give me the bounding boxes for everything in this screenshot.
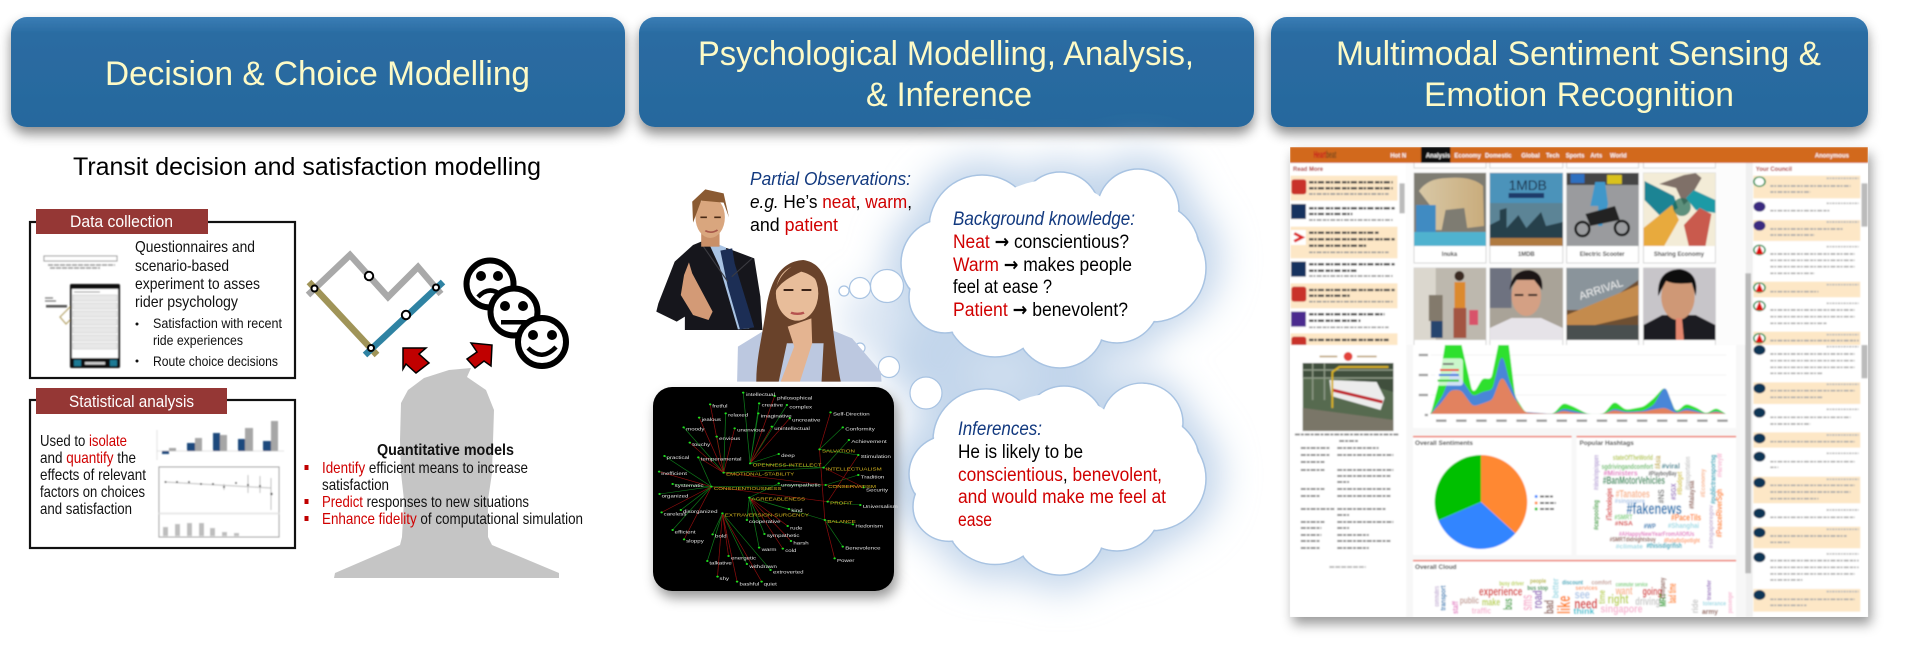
background knowledge text <box>953 209 1135 321</box>
overall sentiment pie chart <box>1413 436 1572 555</box>
network graph: extroverted <box>773 570 804 575</box>
right comment feed <box>1745 163 1868 617</box>
background knowledge text: Neat → conscientious? <box>953 231 1129 253</box>
data collection text: Route choice decisions <box>153 353 278 369</box>
network graph: rude <box>790 526 802 531</box>
photo: interview portrait <box>1490 268 1563 340</box>
network graph: temperamental <box>701 457 742 462</box>
dashboard top bar: Arts <box>1590 153 1603 160</box>
silhouette head <box>334 368 559 578</box>
data collection text: Questionnaires and <box>135 239 255 256</box>
overall word cloud: people <box>1530 578 1546 585</box>
popular hashtags word cloud: #climate <box>1616 542 1643 550</box>
overall word cloud: need <box>1574 597 1598 612</box>
overall word cloud: make <box>1482 598 1500 608</box>
popular hashtags word cloud: #Economy <box>1700 469 1707 497</box>
overall word cloud: see <box>1575 587 1590 601</box>
network graph: unenvious <box>737 428 765 433</box>
partial observations text <box>750 169 912 235</box>
panel: semantic network <box>653 387 898 591</box>
photo: 1MDB skyline: 1MDB <box>1509 177 1547 193</box>
network graph: SALVATION <box>822 449 855 454</box>
dashboard top bar: Global <box>1521 153 1540 160</box>
network graph: sympathetic <box>767 533 800 539</box>
popular hashtags word cloud: #SMRT <box>1614 512 1633 521</box>
quantitative models text <box>304 442 583 528</box>
overall word cloud: transport <box>1440 585 1448 611</box>
news image cards: Economy <box>1454 153 1482 160</box>
overall word cloud: commuter service <box>1616 582 1648 588</box>
network graph: Conformity <box>845 427 875 432</box>
inferences text: conscientious, benevolent, <box>958 465 1162 486</box>
popular hashtags word cloud: #Tanatoes <box>1616 487 1650 500</box>
overall word cloud: time <box>1596 590 1607 604</box>
arrow: right red arrow <box>467 343 492 368</box>
popular hashtags word cloud: #BanMotorVehicles <box>1603 474 1665 487</box>
dashboard top bar: Heartbeat <box>1314 150 1337 161</box>
network graph: relaxed <box>728 413 748 418</box>
popular hashtags word cloud: #Malaysia <box>1689 480 1696 509</box>
bar chart <box>157 421 284 460</box>
left news feed <box>1290 163 1406 347</box>
overall word cloud: transfer <box>1705 580 1713 600</box>
overall word cloud: going <box>1643 585 1662 598</box>
photo: minister portrait <box>1644 268 1715 340</box>
popular hashtags word cloud: #SMRTdidnightsbuy <box>1610 535 1656 543</box>
network graph: inefficient <box>661 471 687 477</box>
inferences text: He is likely to be <box>958 442 1083 463</box>
overall sentiment pie chart: Overall Sentiments <box>1415 440 1473 447</box>
popular hashtags word cloud: #Asia <box>1653 455 1663 469</box>
popular hashtags word cloud: sgdrivingandcomfort <box>1602 463 1653 471</box>
network graph: warm <box>760 547 777 553</box>
background knowledge text: Patient → benevolent? <box>953 299 1128 321</box>
tab: statistical analysis: Statistical analysis <box>69 392 194 411</box>
data collection text: experiment to asses <box>135 276 260 293</box>
photo: arrival hall: ARRIVAL <box>1578 277 1625 303</box>
statistical analysis text: Used to isolate <box>40 433 127 450</box>
overall word cloud: experience <box>1479 585 1522 598</box>
popular hashtags word cloud: #WP <box>1644 522 1656 530</box>
network graph: harsh <box>793 541 809 546</box>
overall word cloud: tolerance <box>1703 601 1726 607</box>
network graph: cooperative <box>749 519 781 525</box>
network graph: creative <box>762 403 783 408</box>
news image cards: Analysis <box>1426 153 1451 160</box>
network graph: unsympathetic <box>781 483 821 488</box>
network graph: Security <box>866 488 888 493</box>
quantitative models text: Quantitative models <box>377 442 514 459</box>
statistical analysis text: and quantify the <box>40 450 136 467</box>
network graph: disorganized <box>683 509 717 515</box>
overall word cloud: want <box>1615 584 1633 597</box>
arrow: left red arrow <box>403 348 429 373</box>
network graph: PROFIT <box>830 501 853 506</box>
network graph: intellectual <box>746 392 775 398</box>
network graph: careless <box>664 512 687 517</box>
overall word cloud: comfort <box>1592 580 1612 586</box>
panel: heartbeat dashboard <box>1290 147 1868 620</box>
popular hashtags word cloud: #singaporegov <box>1708 504 1715 548</box>
overall word cloud: Overall Cloud <box>1415 564 1457 571</box>
icon: happy face <box>518 318 566 366</box>
inferences text: and would make me feel at <box>958 487 1167 508</box>
inferences text: ease <box>958 510 992 531</box>
network graph: envious <box>719 436 740 442</box>
panel: data collection <box>30 209 295 378</box>
dashboard top bar: Analysis <box>1426 153 1451 160</box>
network graph: unintellectual <box>774 426 810 432</box>
overall word cloud: traffic <box>1472 606 1491 615</box>
dashboard top bar: Hot News <box>1390 153 1418 160</box>
transit map icon <box>308 255 443 355</box>
network graph: complex <box>789 405 812 410</box>
statistical analysis text: effects of relevant <box>40 467 146 484</box>
icon: sad face <box>466 260 514 308</box>
image captions: Electric Scooter <box>1580 252 1625 258</box>
popular hashtags word cloud: #ReliefInSpotlight <box>1664 536 1700 544</box>
quantitative models text: satisfaction <box>322 477 389 494</box>
header: multimodal sentiment sensing <box>1271 17 1868 127</box>
network graph: organized <box>662 494 688 499</box>
partial observations text: Partial Observations: <box>750 169 911 189</box>
overall word cloud: MRT <box>1657 593 1668 607</box>
overall word cloud: better <box>1550 578 1561 598</box>
icon: neutral face <box>490 288 538 336</box>
overall word cloud: ride <box>1689 599 1700 613</box>
network graph: BALANCE <box>827 519 856 525</box>
photo: MRT train <box>1303 363 1393 431</box>
tab: statistical analysis <box>36 388 227 414</box>
overall word cloud <box>1413 560 1736 620</box>
network graph: EXTRAVERSION-SURGENCY <box>725 513 809 518</box>
overall word cloud: army <box>1702 608 1718 616</box>
popular hashtags word cloud: #singapore <box>1615 497 1645 505</box>
dashboard top bar: Anonymous <box>1815 153 1850 160</box>
photo: polar bear <box>1414 173 1486 246</box>
dashboard top bar: Domestic <box>1485 153 1512 160</box>
header: psychological modelling: & Inference <box>866 76 1032 114</box>
popular hashtags word cloud: #SGX <box>1670 483 1678 500</box>
quantitative models text: Predict responses to new situations <box>322 494 529 511</box>
cloud: background knowledge <box>901 169 1206 368</box>
panel: statistical analysis <box>30 388 295 548</box>
network graph: imaginative <box>761 414 792 419</box>
network graph: uncreative <box>792 418 820 423</box>
popular hashtags word cloud: #fakenews <box>1626 500 1682 518</box>
photo: thinking woman <box>737 260 882 382</box>
header: decision and choice modelling: Decision & Choice Modelling <box>105 55 530 93</box>
survey phone screenshot <box>44 256 120 368</box>
popular hashtags word cloud: #Ministers <box>1604 469 1638 477</box>
network graph: philosophical <box>777 396 812 401</box>
dashboard top bar: Tech <box>1546 153 1560 160</box>
popular hashtags word cloud: stateOfTheWorld <box>1613 454 1653 462</box>
news image cards: Tech <box>1546 153 1560 160</box>
network graph: Achievement <box>851 439 887 445</box>
popular hashtags word cloud: #transportation <box>1684 457 1692 490</box>
network graph: systematic <box>675 483 704 489</box>
photo: hands illustration <box>1644 173 1715 246</box>
data collection text: ride experiences <box>153 332 243 348</box>
network graph: bashful <box>740 582 759 587</box>
thought bubble dots <box>839 270 942 409</box>
photo: elderly walker <box>1414 268 1486 340</box>
overall word cloud: public <box>1460 596 1479 606</box>
data collection text: Satisfaction with recent <box>153 315 282 331</box>
network graph: deep <box>781 453 795 459</box>
right comment feed: Your Council <box>1756 167 1792 173</box>
network graph: fretful <box>712 404 727 409</box>
network graph: INTELLECTUALISM <box>826 467 882 472</box>
inferences text: Inferences: <box>958 419 1042 440</box>
news image cards: Sports <box>1566 153 1585 160</box>
background knowledge text: Background knowledge: <box>953 209 1135 230</box>
network graph: Stimulation <box>861 454 891 460</box>
overall word cloud: driving <box>1635 595 1660 608</box>
network graph: efficient <box>675 530 696 535</box>
overall word cloud: bad time <box>1667 583 1679 603</box>
popular hashtags word cloud: #NS <box>1657 489 1666 503</box>
overall word cloud: company <box>1660 577 1667 598</box>
overall word cloud: sms <box>1519 595 1536 611</box>
center background <box>1406 163 1746 345</box>
line and bar plot <box>159 467 279 537</box>
overall word cloud: right <box>1608 592 1629 607</box>
network graph: energetic <box>731 556 756 561</box>
background knowledge text: feel at ease ? <box>953 277 1052 298</box>
network graph: Universalism <box>863 504 898 510</box>
popular hashtags word cloud: #PaceTils <box>1671 513 1701 523</box>
network graph: Tradition <box>861 475 884 480</box>
network graph: shy <box>720 576 729 582</box>
photo: 1MDB skyline <box>1490 173 1563 246</box>
cloud glow background <box>856 169 1206 575</box>
popular hashtags word cloud: #AHappyNewYearFromAllOfUs <box>1619 530 1694 538</box>
news image cards: Domestic <box>1485 153 1512 160</box>
tab: data collection <box>36 209 208 234</box>
network graph: OPENNESS-INTELLECT <box>753 463 822 468</box>
partial observations text: and patient <box>750 215 838 235</box>
network graph: EMOTIONAL-STABILITY <box>726 472 795 477</box>
company profile card <box>1290 344 1399 568</box>
overall word cloud: bad <box>1541 600 1557 614</box>
photo: arrival hall <box>1567 268 1639 340</box>
network graph: practical <box>667 455 689 461</box>
quantitative models text: Identify efficient means to increase <box>322 460 528 477</box>
statistical analysis text: factors on choices <box>40 484 145 501</box>
popular hashtags word cloud: #ridesharingsingapore <box>1593 455 1601 490</box>
overall word cloud: services <box>1575 585 1598 592</box>
popular hashtags word cloud: #HarveyW <box>1717 453 1724 477</box>
area chart <box>1413 344 1728 422</box>
overall word cloud: commuters <box>1433 586 1441 607</box>
header: psychological modelling <box>639 17 1254 127</box>
cloud: inferences <box>909 383 1206 575</box>
popular hashtags word cloud: #carpooling <box>1593 500 1601 530</box>
data collection text: scenario-based <box>135 258 229 275</box>
statistical analysis text <box>40 433 146 518</box>
network graph: CONSERVATISM <box>828 484 876 490</box>
header: multimodal sentiment sensing: Multimodal Sentiment Sensing & <box>1336 35 1821 73</box>
network graph: cold <box>785 548 796 554</box>
photo: motorbike rider <box>1567 173 1639 246</box>
quantitative models text: Enhance fidelity of computational simulation <box>322 511 583 528</box>
subtitle: transit modelling: Transit decision and satisfaction modelling <box>73 153 541 181</box>
overall word cloud: busy driver <box>1499 581 1524 587</box>
network graph: talkative <box>709 561 732 566</box>
popular hashtags word cloud: #Budget <box>1676 471 1684 495</box>
overall word cloud: bus stop <box>1527 585 1548 592</box>
network graph <box>658 392 898 587</box>
data collection text <box>135 239 282 369</box>
network graph: AGREEABLENESS <box>751 497 805 502</box>
dashboard top bar: Economy <box>1454 153 1482 160</box>
image captions <box>1442 252 1705 258</box>
left news feed: Read More <box>1293 167 1324 173</box>
overall word cloud: passenger <box>1727 591 1734 613</box>
network graph: jealous <box>701 417 721 423</box>
popular hashtags word cloud: #Technologies <box>1604 488 1614 521</box>
header: decision and choice modelling <box>11 17 625 127</box>
network graph: Benevolence <box>845 546 881 551</box>
network graph: quiet <box>764 582 777 587</box>
news image cards: Global <box>1521 153 1540 160</box>
popular hashtags word cloud <box>1577 436 1736 555</box>
overall word cloud: singapore <box>1600 602 1643 615</box>
overall word cloud: discount <box>1562 580 1584 586</box>
popular hashtags word cloud: #NSA <box>1615 519 1633 527</box>
network graph: bold <box>715 534 727 539</box>
network graph: touchy <box>692 442 710 448</box>
overall word cloud: think <box>1573 607 1594 616</box>
news image cards: Arts <box>1590 153 1603 160</box>
partial observations text: e.g. He’s neat, warm, <box>750 192 912 212</box>
header: multimodal sentiment sensing: Emotion Recognition <box>1424 76 1734 114</box>
image captions: Inuka <box>1442 252 1458 258</box>
dashboard top bar: Sports <box>1566 153 1585 160</box>
popular hashtags word cloud: #viral <box>1662 462 1680 470</box>
popular hashtags word cloud: #PeaceRiverSgh <box>1714 489 1724 537</box>
background knowledge text: Warm → makes people <box>953 254 1132 276</box>
inferences text <box>958 419 1167 531</box>
dashboard top bar: World <box>1610 153 1627 160</box>
data collection text: rider psychology <box>135 294 238 311</box>
image captions: Sharing Economy <box>1654 252 1705 258</box>
popular hashtags word cloud: Popular Hashtags <box>1579 440 1634 447</box>
network graph: withdrawn <box>748 564 777 570</box>
popular hashtags word cloud: #Shanghai <box>1668 522 1699 530</box>
overall word cloud: bus <box>1502 598 1515 610</box>
network graph: moody <box>686 427 705 432</box>
news image cards: World <box>1610 153 1627 160</box>
popular hashtags word cloud: #publictransportsg <box>1710 455 1718 504</box>
news image cards <box>1406 147 1746 348</box>
overall word cloud: staff <box>1451 601 1460 614</box>
network graph: Self-Direction <box>833 412 870 417</box>
dashboard top bar <box>1290 147 1868 163</box>
overall word cloud: like <box>1555 596 1575 614</box>
popular hashtags word cloud: #PlayboyBay <box>1649 469 1677 477</box>
network graph: kind <box>791 508 803 514</box>
image captions: 1MDB <box>1518 252 1535 258</box>
overall word cloud: road <box>1530 590 1545 609</box>
photo: man offering handshake <box>656 189 762 330</box>
network graph: Power <box>837 558 855 564</box>
popular hashtags word cloud: #thisisdigrifish <box>1647 542 1682 550</box>
header: psychological modelling: Psychological Modelling, Analysis, <box>698 35 1194 73</box>
network graph: sloppy <box>686 539 704 544</box>
network graph: CONSCIENTIOUSNESS <box>714 486 782 492</box>
tab: data collection: Data collection <box>70 212 173 231</box>
network graph: Hedonism <box>855 524 883 529</box>
statistical analysis text: and satisfaction <box>40 501 132 518</box>
